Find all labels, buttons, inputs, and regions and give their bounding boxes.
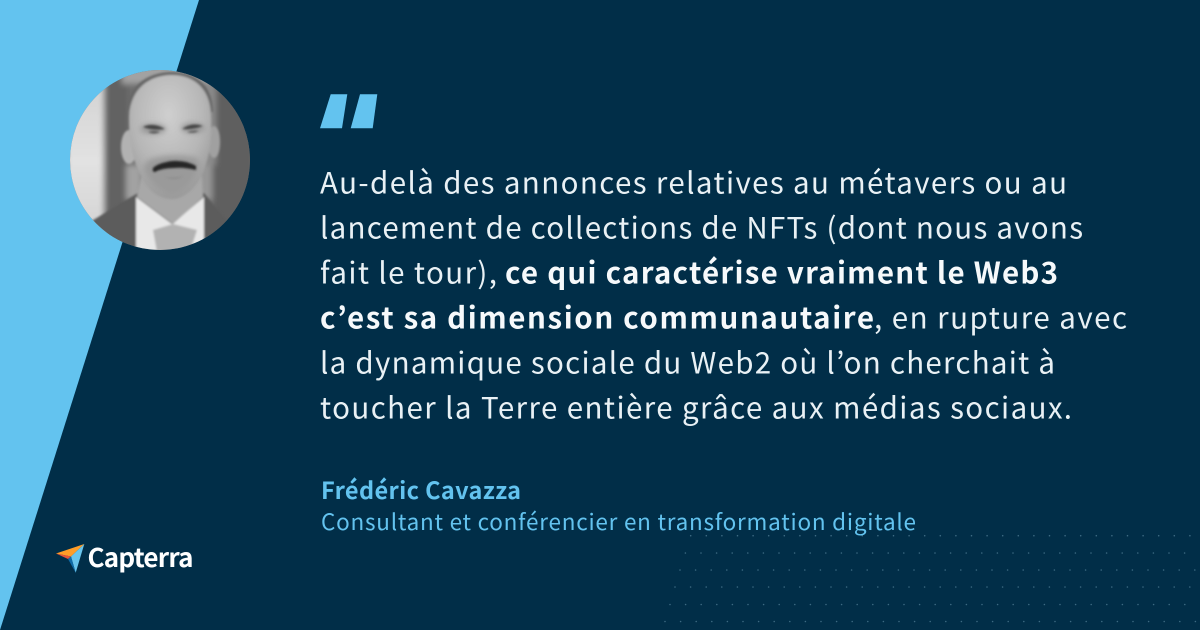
quotation mark icon xyxy=(320,94,377,128)
icon: Capterra arrow xyxy=(56,544,84,573)
shirt xyxy=(136,197,204,252)
eyes xyxy=(143,125,165,130)
quote text: , en rupture avec xyxy=(874,296,1127,338)
portrait photo xyxy=(70,70,250,250)
eye shadows xyxy=(140,124,166,134)
moustache xyxy=(153,161,196,172)
head xyxy=(129,75,211,199)
logo wordmark: Capterra xyxy=(88,538,194,575)
quote text: lancement de collections de NFTs (dont nous avons xyxy=(320,206,1083,248)
quote text xyxy=(320,160,1127,428)
quote text: la dynamique sociale du Web2 où l’on cherchait à xyxy=(320,340,1055,382)
quote text: ce qui caractérise vraiment le Web3 xyxy=(505,250,1058,292)
dot pattern xyxy=(665,536,1200,622)
quote text: Au-delà des annonces relatives au métavers ou au xyxy=(320,160,1067,202)
stubble xyxy=(144,154,199,190)
neck xyxy=(137,172,203,224)
mouth xyxy=(165,176,184,179)
quote text: toucher la Terre entière grâce aux médias sociaux. xyxy=(320,386,1072,428)
quote text: c’est sa dimension communautaire xyxy=(320,296,874,338)
jacket xyxy=(92,192,224,247)
ears xyxy=(121,130,137,164)
Capterra logo xyxy=(56,538,194,575)
author name: Frédéric Cavazza xyxy=(321,472,521,506)
light blue diagonal band xyxy=(0,0,199,630)
author role: Consultant et conférencier en transformation digitale xyxy=(321,505,916,537)
quote text: fait le tour), xyxy=(320,250,497,292)
hair ring xyxy=(127,72,213,112)
tie xyxy=(153,224,197,252)
